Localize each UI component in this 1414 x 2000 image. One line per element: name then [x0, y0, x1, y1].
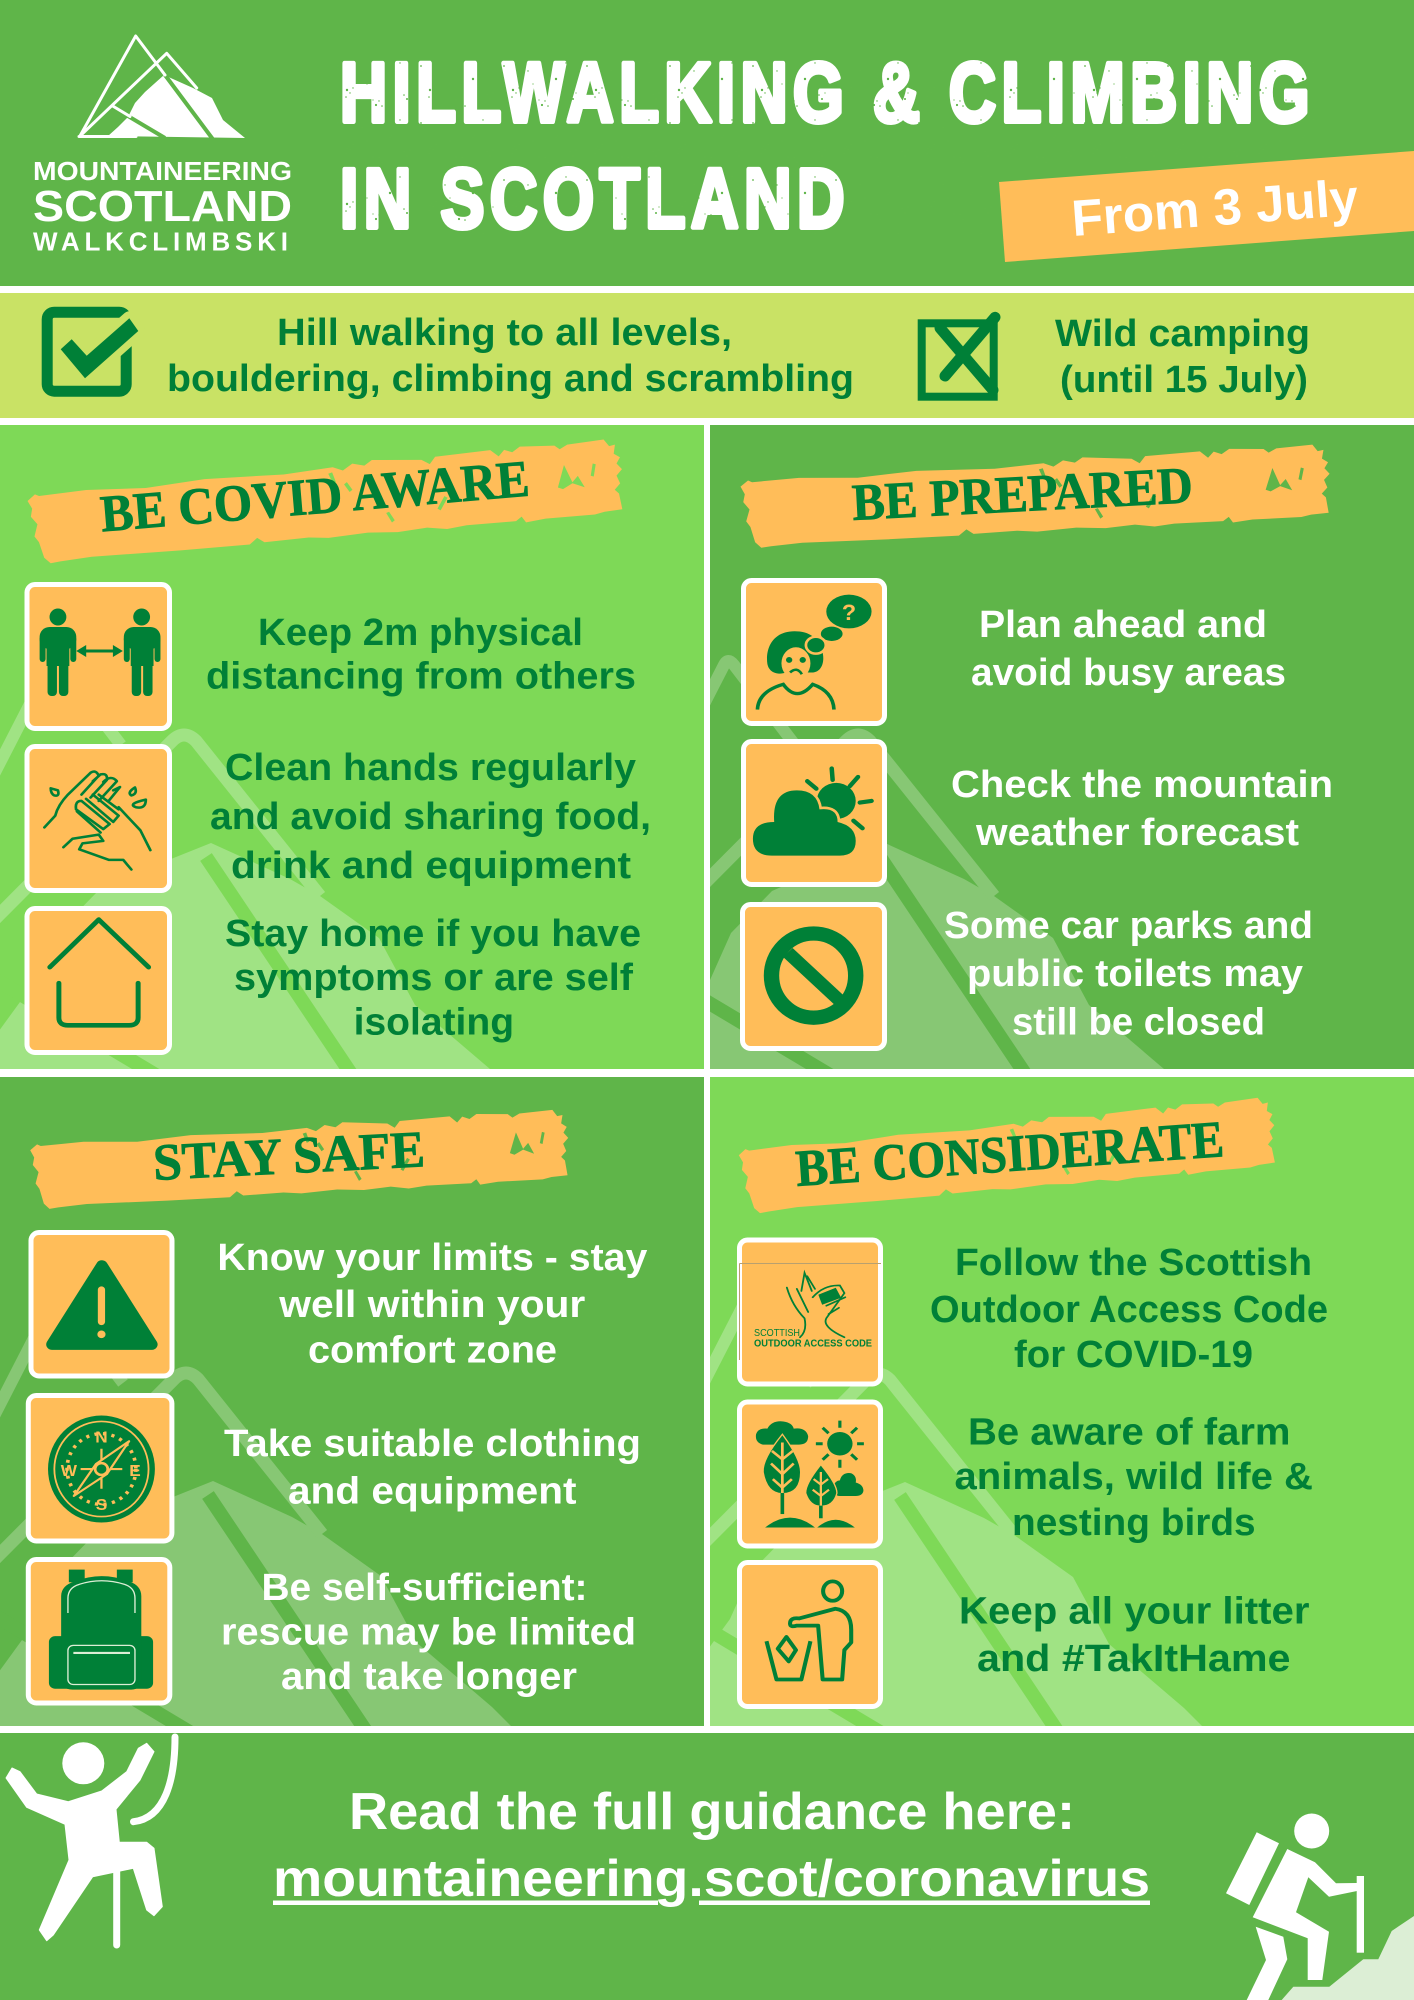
date tag: From 3 July: [999, 151, 1414, 262]
text: litter: Keep all your litter: [959, 1590, 1310, 1632]
icon: sun and cloud: [744, 742, 884, 884]
text: litter: and #TakItHame: [977, 1638, 1290, 1680]
icon: scottish outdoor access code: SCOTTISH: [754, 1328, 800, 1339]
icon: compass: S: [96, 1495, 107, 1514]
text: plan ahead: [971, 604, 1286, 694]
text: know your limits: Know your limits - stay: [217, 1237, 647, 1279]
text: car parks: still be closed: [1012, 1002, 1265, 1044]
icon: warning triangle: [31, 1232, 172, 1376]
heading: be prepared: [740, 444, 1332, 549]
text: plan ahead: avoid busy areas: [971, 652, 1286, 694]
text: clean hands: and avoid sharing food,: [210, 796, 651, 838]
text: access code: Outdoor Access Code: [930, 1289, 1328, 1331]
icon: compass: W: [61, 1462, 77, 1480]
text: plan ahead: Plan ahead and: [979, 604, 1267, 646]
allowed and not allowed band: [0, 293, 1414, 418]
panel: stay safe: [0, 1077, 704, 1749]
icon: no entry sign: [742, 904, 884, 1048]
title: IN SCOTLAND: [340, 152, 850, 246]
icon: house: [27, 908, 170, 1052]
heading: be prepared: BE PREPARED: [851, 457, 1194, 532]
text: check weather: Check the mountain: [951, 764, 1333, 806]
title: [335, 46, 1315, 246]
text: clean hands: Clean hands regularly: [225, 747, 636, 789]
text: clean hands: [210, 747, 651, 887]
footer banner: [0, 1733, 1414, 2000]
text: farm animals: Be aware of farm: [968, 1412, 1290, 1454]
text: know your limits: comfort zone: [308, 1330, 557, 1372]
heading: be covid aware: BE COVID AWARE: [98, 451, 531, 543]
icon: tick box: [47, 312, 138, 391]
text: self sufficient: [221, 1567, 636, 1698]
text: access code: Follow the Scottish: [955, 1242, 1312, 1284]
icon: scottish outdoor access code: OUTDOOR ACCESS CODE: [754, 1338, 872, 1350]
text: keep 2m: distancing from others: [206, 656, 636, 698]
icon: worried woman thinking: ?: [842, 600, 856, 625]
icon: compass: N: [95, 1428, 108, 1446]
text: car parks: public toilets may: [967, 953, 1303, 995]
icon: backpack: [28, 1560, 170, 1703]
allowed activities text: [167, 312, 854, 400]
icon: trees, sun and clouds: [740, 1402, 880, 1546]
heading: be covid aware: [26, 438, 626, 565]
text: clean hands: drink and equipment: [231, 845, 631, 887]
icon: compass: E: [129, 1462, 141, 1480]
text: stay home: [225, 913, 641, 1044]
text: clothing: and equipment: [288, 1470, 577, 1512]
text: stay home: isolating: [354, 1002, 514, 1044]
text: self sufficient: and take longer: [281, 1656, 577, 1698]
allowed activities text: Hill walking to all levels,: [277, 312, 732, 354]
icon: scottish outdoor access code: [740, 1240, 881, 1384]
date tag: From 3 July: From 3 July: [1070, 169, 1361, 247]
text: know your limits: well within your: [278, 1284, 586, 1326]
text: car parks: Some car parks and: [944, 905, 1313, 947]
wild camping text: [1055, 313, 1310, 401]
heading: be considerate: [738, 1096, 1278, 1215]
text: keep 2m: [206, 612, 636, 698]
text: know your limits: [217, 1237, 647, 1372]
icon: worried woman thinking: [744, 580, 884, 724]
text: car parks: [944, 905, 1313, 1044]
icon: climber: [6, 1737, 175, 1945]
icon: washing hands: [27, 746, 170, 890]
text: self sufficient: Be self-sufficient:: [262, 1567, 588, 1609]
text: check weather: weather forecast: [975, 812, 1299, 854]
panel: be covid aware: [0, 425, 704, 1111]
text: farm animals: nesting birds: [1012, 1502, 1256, 1544]
text: stay home: Stay home if you have: [225, 913, 641, 955]
heading: be considerate: BE CONSIDERATE: [794, 1111, 1226, 1198]
text: keep 2m: Keep 2m physical: [258, 612, 583, 654]
text: clothing: Take suitable clothing: [224, 1423, 641, 1465]
icon: compass: [28, 1396, 172, 1541]
panel: be prepared: [710, 425, 1414, 1069]
panel: be considerate: [680, 1077, 1414, 1750]
text: self sufficient: rescue may be limited: [221, 1612, 636, 1654]
guidance text and link: [273, 1783, 1150, 1908]
text: farm animals: [954, 1412, 1313, 1544]
allowed activities text: bouldering, climbing and scrambling: [167, 358, 854, 400]
text: litter: [959, 1590, 1310, 1680]
logo: Mountaineering Scotland: MOUNTAINEERING: [33, 158, 292, 186]
text: farm animals: animals, wild life &: [954, 1456, 1313, 1498]
heading: stay safe: STAY SAFE: [152, 1121, 426, 1192]
text: clothing: [224, 1423, 641, 1512]
header banner: [0, 0, 1414, 286]
text: access code: for COVID-19: [1014, 1334, 1253, 1376]
wild camping text: (until 15 July): [1060, 359, 1308, 401]
icon: hiker: [1226, 1814, 1414, 2000]
guidance text and link: Read the full guidance here:: [349, 1783, 1075, 1841]
text: stay home: symptoms or are self: [234, 957, 633, 999]
icon: physical distancing: [27, 584, 170, 728]
logo: Mountaineering Scotland: SCOTLAND: [33, 182, 292, 231]
logo: Mountaineering Scotland: WALKCLIMBSKI: [33, 226, 288, 256]
heading: stay safe: [30, 1109, 571, 1210]
wild camping text: Wild camping: [1055, 313, 1310, 355]
logo: Mountaineering Scotland: [33, 36, 292, 256]
guidance text and link: mountaineering.scot/coronavirus: [273, 1850, 1150, 1908]
text: check weather: [951, 764, 1333, 854]
icon: crossed box: [922, 317, 995, 397]
icon: person using litter bin: [740, 1562, 880, 1706]
text: access code: [930, 1242, 1328, 1376]
